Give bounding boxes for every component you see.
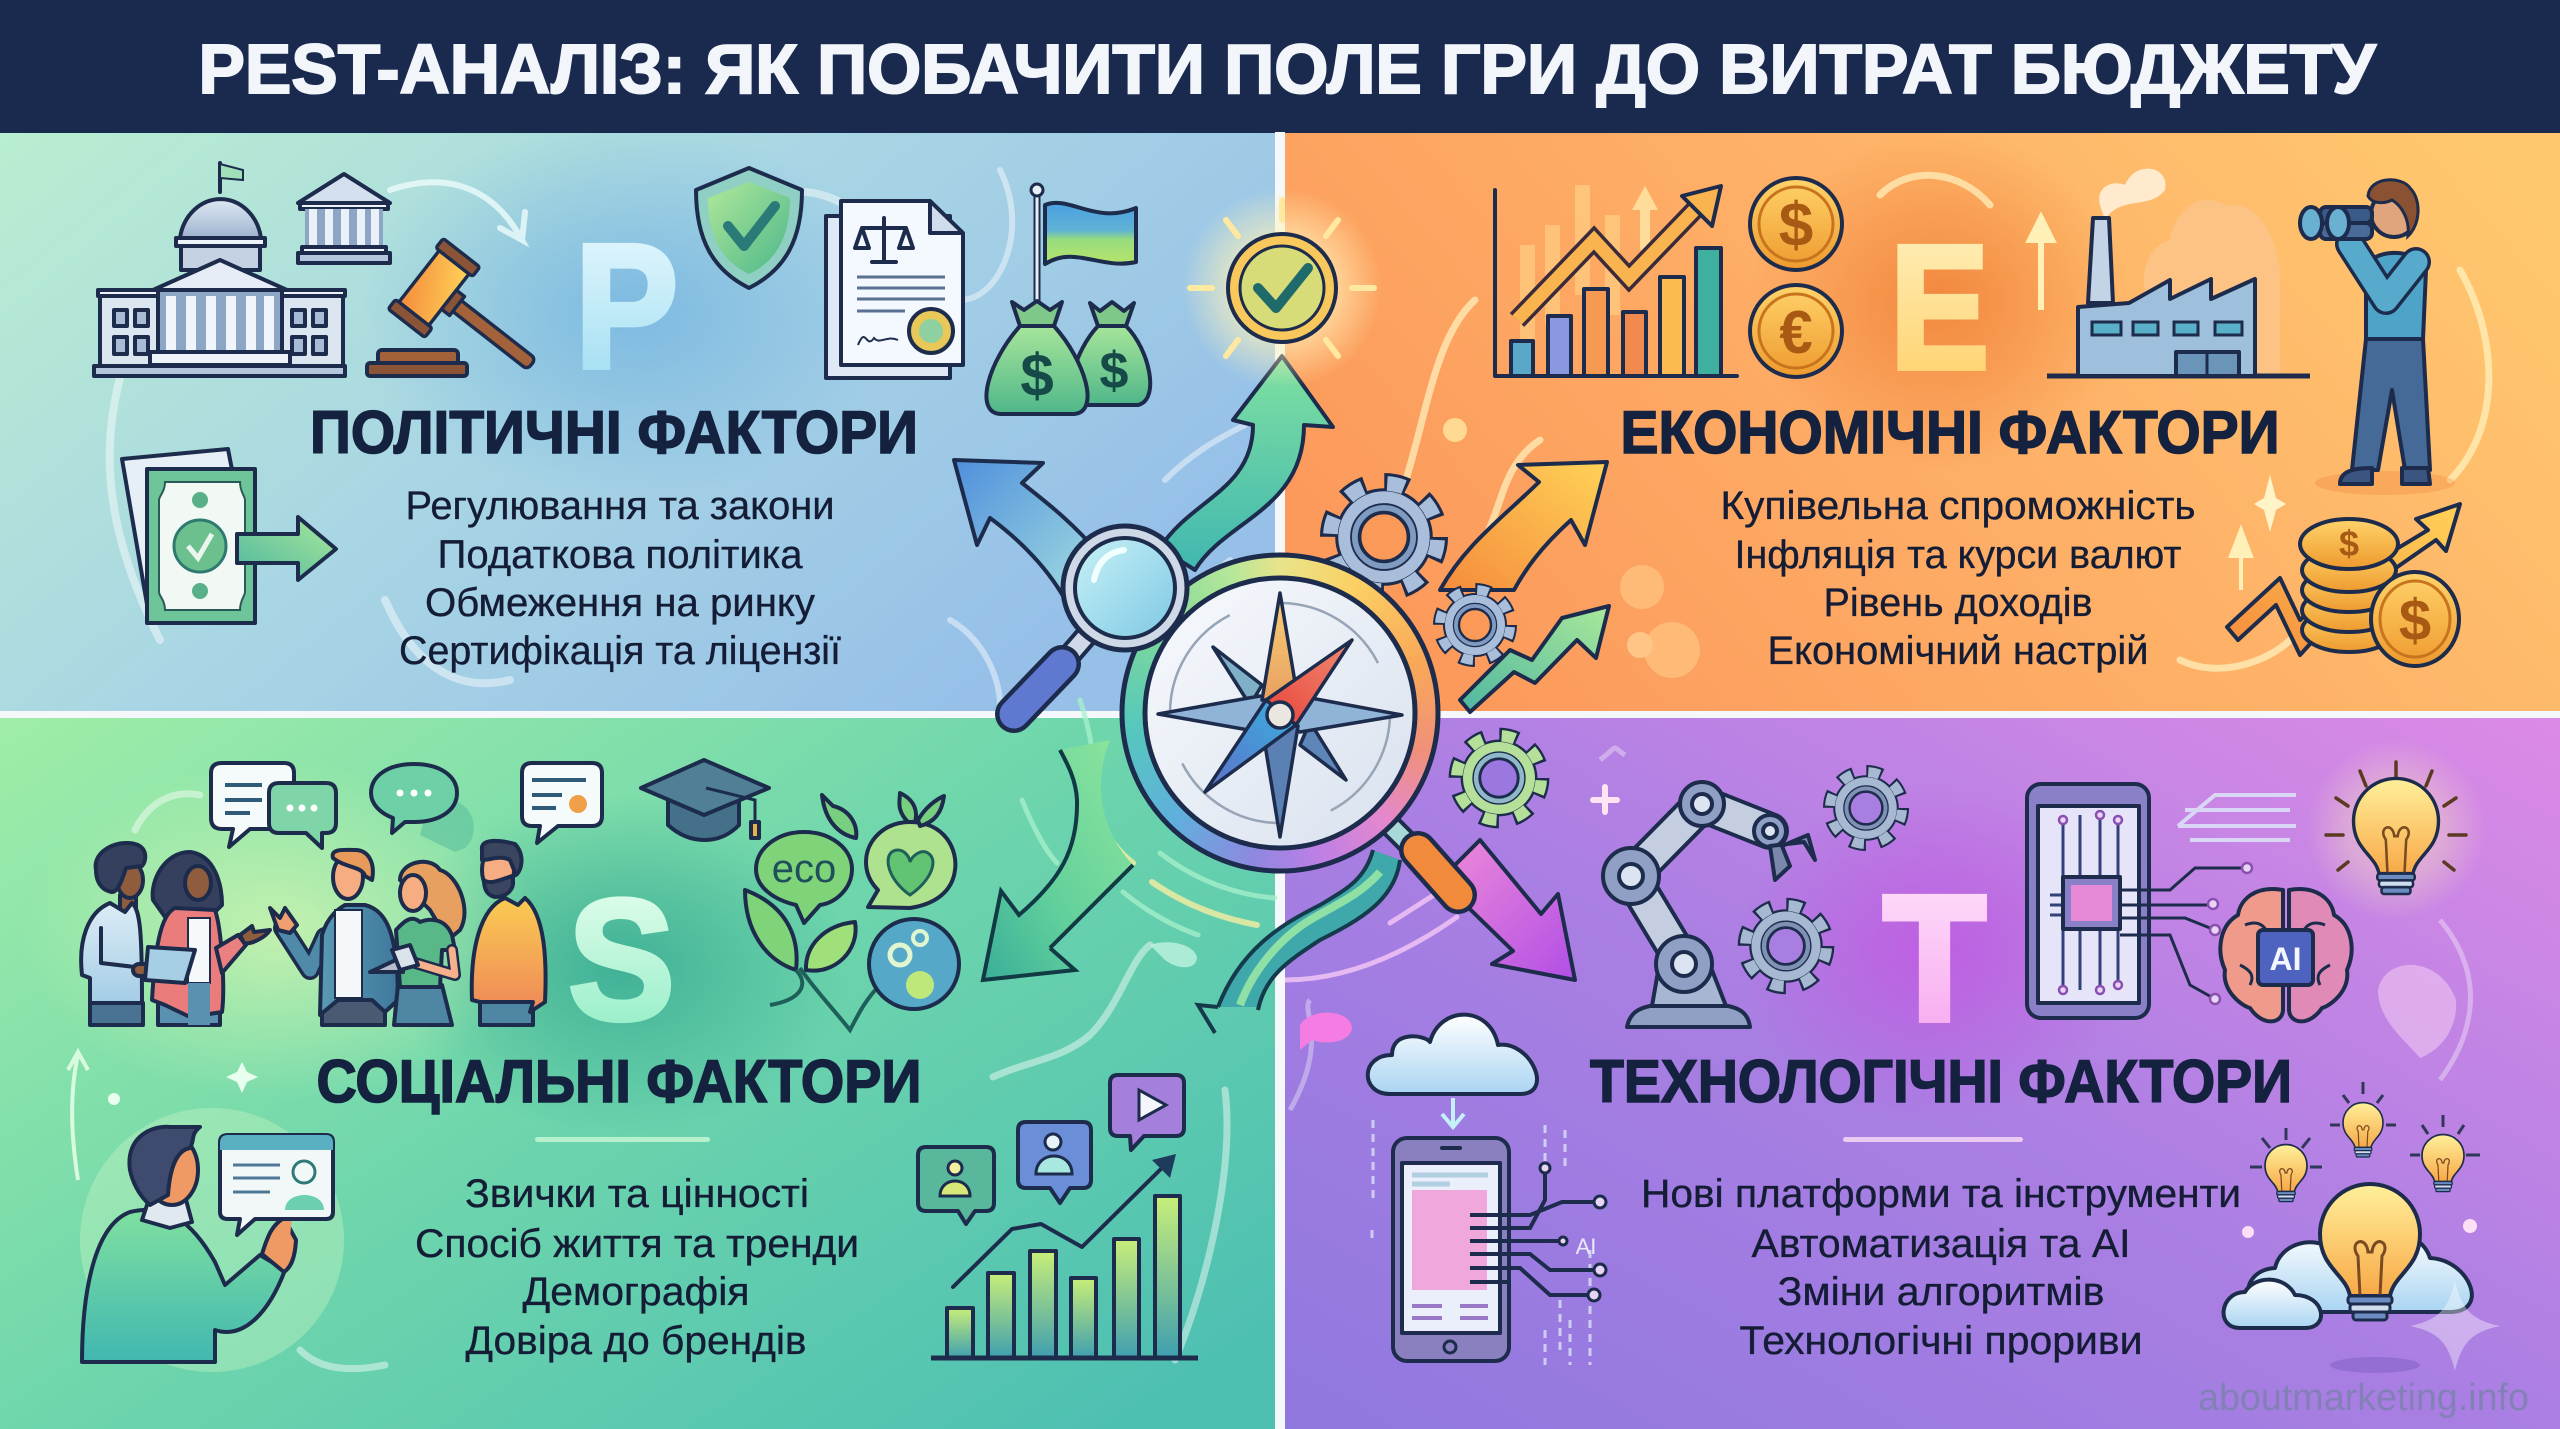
title bar [0, 0, 2560, 133]
text block: political factors list: Сертифікація та ліцензії [399, 629, 841, 673]
text block: economic factors list: Купівельна спроможність [1720, 484, 2196, 528]
arrow: pink down-right [1440, 840, 1575, 980]
icon: swoosh arrow [390, 182, 525, 240]
icon: coin stack with arrow: $ [2399, 588, 2431, 653]
icon: faded pie chart and gear [1620, 565, 1700, 678]
icon: glowing check badge [1182, 188, 1382, 388]
icon: magnifying glass [1014, 526, 1187, 714]
icon: capitol building [94, 163, 345, 376]
icon: four-point star watermark [2410, 1281, 2500, 1371]
compass star [1158, 593, 1402, 837]
icon: phone with data lines: AI [1576, 1234, 1596, 1259]
compass dial [1122, 555, 1438, 871]
arrow: green up [1160, 356, 1333, 570]
panel: social factors [0, 718, 1275, 1429]
chart: social growth bars [931, 1154, 1198, 1358]
text block: technological factors list: Технологічні прориви [1740, 1319, 2142, 1363]
icon: media bubbles [918, 1075, 1184, 1224]
heading: technological factors: ТЕХНОЛОГІЧНІ ФАКТОРИ [1590, 1048, 2292, 1115]
icon: pink arcs [1285, 893, 1457, 980]
icon: pink chat bubble [1300, 1013, 1352, 1050]
icon: gears around compass [1330, 483, 1541, 820]
icon: pale blob [1150, 942, 1197, 967]
icon: phone with data lines [1372, 1120, 1606, 1365]
text block: technological factors list: Автоматизація та AI [1752, 1222, 2130, 1266]
icon: shield [696, 168, 802, 288]
letter T: T [1884, 861, 1985, 1057]
icon: AI brain [2220, 889, 2352, 1021]
arrow: blue up-left [954, 460, 1100, 605]
panel: technological factors [1285, 718, 2560, 1429]
text block: economic factors list [1720, 484, 2196, 673]
icon: small temple [298, 174, 390, 263]
heading: economic factors: ЕКОНОМІЧНІ ФАКТОРИ [1620, 399, 2280, 466]
icon: dollar coin [1750, 178, 1842, 270]
icon: dollar coin: $ [1779, 191, 1813, 260]
icon: pale blob [2378, 965, 2456, 1058]
arrow: green zigzag [1460, 606, 1609, 712]
text block: social factors list: Демографія [522, 1270, 750, 1314]
icon: eco badges [745, 793, 959, 1030]
icon: bulb over clouds [2224, 1184, 2477, 1373]
icon: coin stack with arrow [2227, 504, 2460, 666]
heading: political factors: ПОЛІТИЧНІ ФАКТОРИ [310, 399, 918, 466]
icon: person with binoculars [2300, 180, 2455, 495]
icon: eco badges: eco [772, 847, 836, 891]
icon: euro coin [1750, 285, 1842, 377]
icon: money bags [986, 301, 1150, 414]
decorative glow divider [535, 1137, 710, 1142]
icon: graduation cap [641, 760, 769, 840]
text block: technological factors list: Зміни алгоритмів [1778, 1270, 2104, 1314]
title: PEST-АНАЛІЗ: ЯК ПОБАЧИТИ ПОЛЕ ГРИ ДО ВИТРАТ БЮДЖЕТУ [198, 30, 2377, 108]
text block: social factors list: Довіра до брендів [466, 1319, 806, 1363]
icon: gavel [367, 238, 559, 399]
icon: AI brain: AI [2270, 941, 2302, 977]
text block: economic factors list: Інфляція та курси валют [1734, 533, 2182, 577]
icon: banknote with arrow [122, 449, 336, 623]
icon: analyst with screen [68, 1052, 344, 1372]
icon: factory [2030, 169, 2310, 376]
icon: euro coin: € [1779, 299, 1813, 366]
icon: light bulb large [2306, 740, 2486, 920]
text block: political factors list: Обмеження на ринку [425, 581, 815, 625]
icon: coin stack with arrow: $ [2339, 523, 2359, 564]
text block: social factors list: Звички та цінності [465, 1172, 809, 1216]
text block: technological factors list [1641, 1172, 2241, 1363]
icon: cloud [1368, 1015, 1537, 1127]
icon: sparkle cross [1593, 787, 1617, 812]
ribbon: teal flowing band [1198, 850, 1400, 1033]
icon: legal document [826, 201, 963, 378]
watermark text: aboutmarketing.info [2198, 1377, 2529, 1419]
icon: group of people [81, 841, 546, 1025]
arrow: orange up-right [1440, 462, 1607, 590]
icon: growth bar chart [1495, 185, 1737, 376]
arrow: green down-left [983, 740, 1133, 980]
decorative glow divider [1843, 1137, 2023, 1142]
text block: social factors list: Спосіб життя та тренди [415, 1222, 859, 1266]
letter E: E [1890, 210, 1989, 406]
icon: money bags: $ [1020, 342, 1054, 409]
text block: social factors list [415, 1172, 859, 1363]
compass needle [1205, 640, 1352, 792]
text block: economic factors list: Економічний настрій [1768, 629, 2148, 673]
icon: sparkle [2254, 475, 2286, 532]
text block: technological factors list: Нові платформи та інструменти [1641, 1172, 2241, 1216]
icon: gears [1746, 772, 1902, 986]
icon: small up arrow [2231, 530, 2251, 590]
heading: social factors: СОЦІАЛЬНІ ФАКТОРИ [316, 1048, 922, 1115]
icon: speech bubbles [211, 763, 602, 852]
icon: money bags: $ [1100, 342, 1129, 400]
letter P: P [575, 209, 678, 405]
icon: magnifier handle lower right [1380, 815, 1458, 895]
icon: robot arm [1603, 782, 1815, 1027]
icon: small bulbs [2250, 1082, 2480, 1202]
text block: political factors list [399, 484, 841, 673]
panel: economic factors [1285, 130, 2560, 711]
panel: political factors [0, 120, 1275, 711]
text block: political factors list: Регулювання та закони [406, 484, 834, 528]
icon: Ukrainian flag [1031, 184, 1136, 302]
text block: economic factors list: Рівень доходів [1824, 581, 2092, 625]
letter S: S [568, 864, 675, 1056]
compass ring [1121, 554, 1439, 872]
text block: political factors list: Податкова політика [438, 533, 803, 577]
icon: circuit tablet [2027, 784, 2296, 1018]
central compass with arrows [954, 188, 1609, 1033]
